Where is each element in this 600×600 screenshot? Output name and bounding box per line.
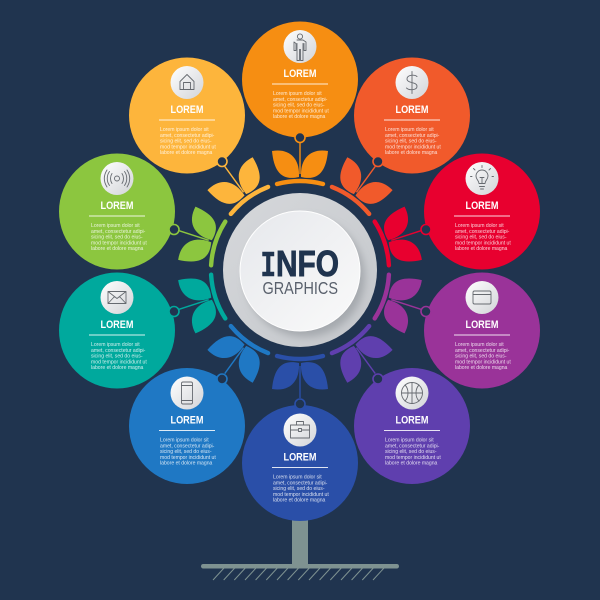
panel: orange person: amet, consectetur adipi- [273,97,328,103]
panel: orange person: Lorem ipsum dolor sit [273,91,322,97]
panel: blue phone: sicing elit, sed do eius- [160,449,212,455]
panel: teal mail: sicing elit, sed do eius- [91,354,143,360]
panel: red bulb: amet, consectetur adipi- [455,229,510,235]
panel: orange-red dollar: sicing elit, sed do eius- [385,138,437,144]
panel: purple card [421,272,540,388]
panel: blue phone: Lorem ipsum dolor sit [160,438,209,444]
panel: red bulb: LOREM [466,200,498,212]
icon: light bulb [466,162,498,195]
icon: person [284,30,316,63]
panel: green signal: amet, consectetur adipi- [91,229,146,235]
panel: yellow home [129,58,245,174]
panel: yellow home: labore et dolore magna [160,150,213,156]
panel: teal mail: LOREM [100,319,134,331]
icon: phone [170,376,204,410]
panel: teal mail: mod tempor incididunt ut [91,359,147,365]
panel: orange person: mod tempor incididunt ut [273,108,329,114]
panel: orange-red dollar [354,58,470,174]
panel: navy briefcase: labore et dolore magna [273,498,326,504]
tree trunk and ground [201,518,399,580]
title: GRAPHICS [262,278,338,298]
panel: orange-red dollar: LOREM [396,104,428,116]
leaves: teal [170,270,227,336]
panel: navy briefcase: mod tempor incididunt ut [273,492,329,498]
panel: violet ball: Lorem ipsum dolor sit [385,438,434,444]
panel: orange person [242,22,358,142]
panel: yellow home: sicing elit, sed do eius- [160,138,212,144]
leaves: purple [373,270,430,336]
panel: blue phone: LOREM [170,414,204,426]
panel: purple card: Lorem ipsum dolor sit [455,342,504,348]
panel: purple card: sicing elit, sed do eius- [455,354,507,360]
panel: teal mail: labore et dolore magna [91,365,144,371]
panel: red bulb: Lorem ipsum dolor sit [455,223,504,229]
panel: orange person: labore et dolore magna [273,114,326,120]
leaves: orange [272,142,328,184]
panel: red bulb [421,154,540,270]
panel: violet ball: mod tempor incididunt ut [385,455,441,461]
icon: basketball [396,376,428,410]
title: I [260,246,276,287]
leaves: orange-red [328,150,398,217]
title: NFO [276,243,339,284]
icon: briefcase [284,414,316,446]
panel: orange person: LOREM [284,68,316,80]
panel: red bulb: sicing elit, sed do eius- [455,234,507,240]
title [260,243,339,298]
panel: purple card: labore et dolore magna [455,365,508,371]
panel: purple card: mod tempor incididunt ut [455,359,511,365]
panel: orange-red dollar: Lorem ipsum dolor sit [385,127,434,133]
panel: purple card: amet, consectetur adipi- [455,348,510,354]
panel: purple card: LOREM [466,319,498,331]
panel: yellow home: Lorem ipsum dolor sit [160,127,209,133]
panel: orange-red dollar: mod tempor incididunt ut [385,144,441,150]
panel: violet ball: LOREM [396,414,428,426]
panel: green signal: sicing elit, sed do eius- [91,234,143,240]
panel: orange-red dollar: amet, consectetur adipi- [385,133,440,139]
panel: teal mail: Lorem ipsum dolor sit [91,342,140,348]
center badge [223,193,377,347]
leaves: green [170,204,227,270]
panel: red bulb: mod tempor incididunt ut [455,240,511,246]
panel: navy briefcase: Lorem ipsum dolor sit [273,474,322,480]
panel: navy briefcase [242,399,358,521]
panel: blue phone: mod tempor incididunt ut [160,455,216,461]
leaves: red [373,204,430,270]
leaves: blue [202,323,272,390]
panel: violet ball: labore et dolore magna [385,460,438,466]
panel: orange-red dollar: labore et dolore magna [385,150,438,156]
panel: yellow home: LOREM [170,104,204,116]
panel: teal mail [59,272,179,388]
panel: violet ball: sicing elit, sed do eius- [385,449,437,455]
panel: yellow home: amet, consectetur adipi- [160,133,215,139]
panel: green signal: LOREM [100,200,134,212]
panel: green signal: mod tempor incididunt ut [91,240,147,246]
panel: blue phone: labore et dolore magna [160,460,213,466]
panel: green signal [59,154,179,270]
panel: orange person: sicing elit, sed do eius- [273,102,325,108]
panel: blue phone [129,368,245,484]
panel: navy briefcase: sicing elit, sed do eius- [273,486,325,492]
icon: dollar [396,66,428,99]
leaves: navy [272,356,328,398]
panel: navy briefcase: amet, consectetur adipi- [273,480,328,486]
panel: navy briefcase: LOREM [284,452,316,464]
panel: violet ball [354,368,470,484]
panel: green signal: Lorem ipsum dolor sit [91,223,140,229]
panel: yellow home: mod tempor incididunt ut [160,144,216,150]
icon: house [170,66,204,99]
leaves: violet [328,323,398,390]
panel: violet ball: amet, consectetur adipi- [385,443,440,449]
panel: teal mail: amet, consectetur adipi- [91,348,146,354]
icon: envelope [100,281,134,314]
icon: card [466,281,498,314]
leaves: yellow [202,150,272,217]
panel: green signal: labore et dolore magna [91,246,144,252]
icon: signal [100,162,134,195]
panel: blue phone: amet, consectetur adipi- [160,443,215,449]
panel: red bulb: labore et dolore magna [455,246,508,252]
